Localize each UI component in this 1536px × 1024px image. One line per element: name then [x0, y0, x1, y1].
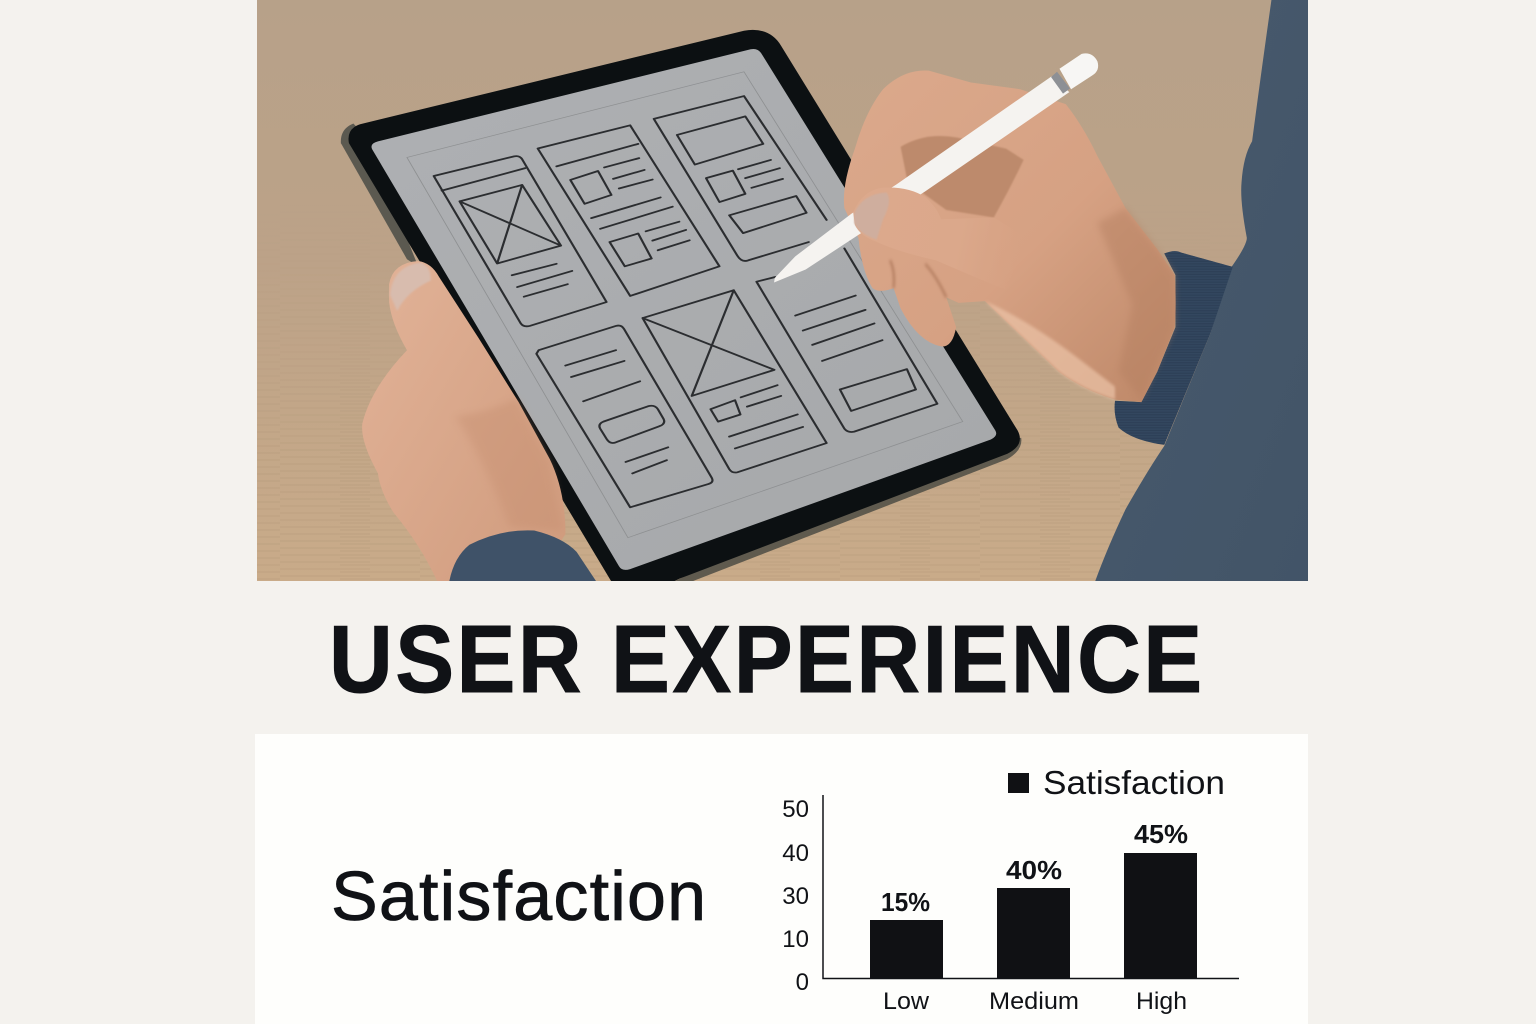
y axis labels: 40: [782, 840, 809, 867]
bar: high: High: [1136, 988, 1187, 1015]
tablet bezel: [348, 30, 1020, 605]
wireframe sketches: [434, 96, 937, 507]
left thumbnail: [390, 263, 431, 311]
wireframe 4: [536, 326, 712, 507]
wireframe 3: [654, 96, 827, 261]
photo: hands sketching wireframes on a tablet: [257, 0, 1312, 617]
wooden table: [257, 0, 1308, 581]
left hand shape: [362, 261, 565, 605]
wireframe 5: [643, 290, 827, 473]
tablet metal edge, bottom: [675, 438, 1022, 581]
bar: high: 45%: [1134, 819, 1188, 849]
left hand holding tablet: [362, 261, 596, 581]
left hand shading: [462, 396, 559, 514]
bar: low: [870, 887, 943, 1015]
y axis labels: 30: [782, 883, 809, 910]
bar chart: [782, 764, 1239, 1015]
bar: high: [1124, 819, 1197, 1015]
tablet screen: [371, 49, 996, 570]
infographic canvas: [255, 0, 1308, 1024]
tablet metal edge, left: [341, 124, 418, 266]
finger creases: [890, 260, 946, 297]
palm shading: [1097, 208, 1175, 400]
thumb over stylus: [853, 188, 920, 233]
left sleeve: [449, 530, 596, 581]
y axis labels: [782, 796, 809, 996]
wireframe 6: [756, 248, 937, 432]
chart legend: Satisfaction: [1043, 764, 1225, 801]
bar: low: 15%: [881, 887, 930, 917]
faint artboard border: [407, 72, 963, 538]
bar: low: Low: [883, 988, 930, 1015]
panel: satisfaction: [255, 734, 1308, 1024]
stylus ring: [1051, 72, 1070, 94]
sweater body, cuff, right hand and stylus: [774, 0, 1312, 617]
shaded gap behind stylus: [901, 136, 1024, 217]
chart axes: [823, 795, 1239, 978]
sweater cuff: [1115, 251, 1233, 445]
palm crease highlight: [985, 301, 1115, 400]
stylus cap: [1059, 53, 1098, 89]
y axis labels: 10: [782, 926, 809, 953]
stylus body: [774, 76, 1069, 282]
y axis labels: 50: [782, 796, 809, 823]
title: USER EXPERIENCE: [329, 606, 1205, 713]
bar: medium: Medium: [989, 988, 1079, 1015]
wireframe 1: [434, 156, 607, 326]
y axis labels: 0: [796, 969, 809, 996]
panel heading: Satisfaction: [331, 857, 707, 935]
tablet with wireframe screen: [341, 30, 1021, 605]
wireframe 2: [538, 125, 719, 296]
thumbnail: [854, 193, 889, 240]
bar: medium: 40%: [1006, 855, 1062, 885]
right hand shape: [844, 70, 1176, 402]
bar: medium: [989, 855, 1079, 1015]
sweater body: [1095, 0, 1308, 581]
panel background: [255, 734, 1308, 1024]
